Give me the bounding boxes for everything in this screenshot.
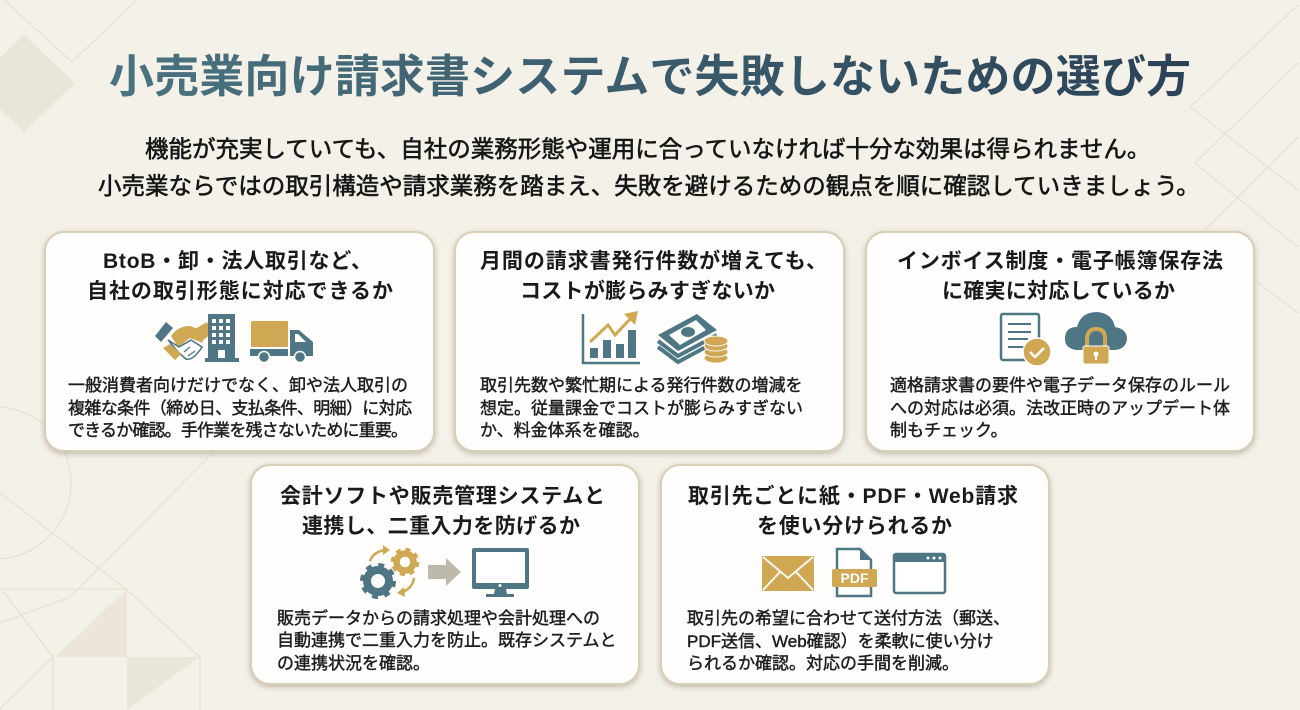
body text: 想定。従量課金でコストが膨らみすぎない (480, 399, 803, 418)
icon: PDF file: PDF (840, 570, 869, 586)
body text: 取引先数や繁忙期による発行件数の増減を (480, 376, 802, 395)
intro text (98, 136, 1200, 199)
icon: growth chart (583, 311, 640, 363)
panel: legal compliance (866, 232, 1254, 451)
icon: delivery truck (250, 321, 313, 362)
body text: 自動連携で二重入力を防止。既存システムと (277, 631, 616, 650)
intro text: 機能が充実していても、自社の業務形態や運用に合っていなければ十分な効果は得られません。 (145, 136, 1150, 162)
icon: gears (362, 545, 418, 597)
icon: checked document (1001, 314, 1051, 366)
heading (280, 485, 605, 538)
arrow (428, 558, 461, 586)
body text: 適格請求書の要件や電子データ保存のルール (890, 375, 1230, 395)
icon: banknotes and coins (658, 314, 728, 363)
icon: cloud lock (1065, 312, 1127, 364)
heading: コストが膨らみすぎないか (520, 279, 775, 303)
body text (890, 375, 1230, 440)
body text: 取引先の希望に合わせて送付方法（郵送、 (687, 609, 1010, 628)
panel: cost scaling (455, 232, 844, 451)
heading: 取引先ごとに紙・PDF・Web請求 (688, 484, 1018, 508)
body text: できるか確認。手作業を残さないために重要。 (68, 421, 408, 440)
body text (277, 608, 616, 673)
panel: system integration (251, 465, 639, 684)
heading: に確実に対応しているか (942, 280, 1175, 303)
body text (480, 376, 803, 440)
body text: か、料金体系を確認。 (480, 421, 650, 440)
heading (688, 484, 1018, 538)
heading (897, 250, 1223, 303)
heading (87, 250, 393, 303)
heading: インボイス制度・電子帳簿保存法 (897, 250, 1223, 273)
intro text: 小売業ならではの取引構造や請求業務を踏まえ、失敗を避けるための観点を順に確認していきましょう。 (98, 173, 1200, 199)
body text (687, 609, 1010, 673)
body text: 一般消費者向けだけでなく、卸や法人取引の (68, 376, 408, 395)
icon: office building (205, 314, 239, 362)
body text: られるか確認。対応の手間を削減。 (687, 654, 959, 673)
icon: monitor (472, 548, 529, 597)
heading: 月間の請求書発行件数が増えても、 (480, 249, 827, 273)
body text: PDF送信、Web確認）を柔軟に使い分け (687, 631, 994, 651)
body text: 販売データからの請求処理や会計処理への (277, 608, 600, 628)
heading (480, 249, 827, 303)
icon: browser window (894, 554, 945, 593)
heading: BtoB・卸・法人取引など、 (103, 250, 372, 273)
panel: delivery methods (661, 465, 1049, 684)
icon: handshake (155, 322, 212, 360)
icon: PDF file (832, 549, 877, 596)
body text (68, 376, 412, 440)
title: 小売業向け請求書システムで失敗しないための選び方 (109, 51, 1191, 102)
body text: への対応は必須。法改正時のアップデート体 (890, 398, 1230, 418)
heading: 連携し、二重入力を防げるか (302, 515, 580, 538)
body text: の連携状況を確認。 (277, 654, 430, 673)
heading: 自社の取引形態に対応できるか (87, 280, 393, 303)
body text: 制もチェック。 (890, 421, 1008, 440)
icon: envelope (762, 556, 814, 591)
panel: transaction types (45, 232, 434, 451)
heading: を使い分けられるか (757, 515, 952, 538)
body text: 複雑な条件（締め日、支払条件、明細）に対応 (68, 399, 412, 418)
heading: 会計ソフトや販売管理システムと (280, 485, 605, 508)
